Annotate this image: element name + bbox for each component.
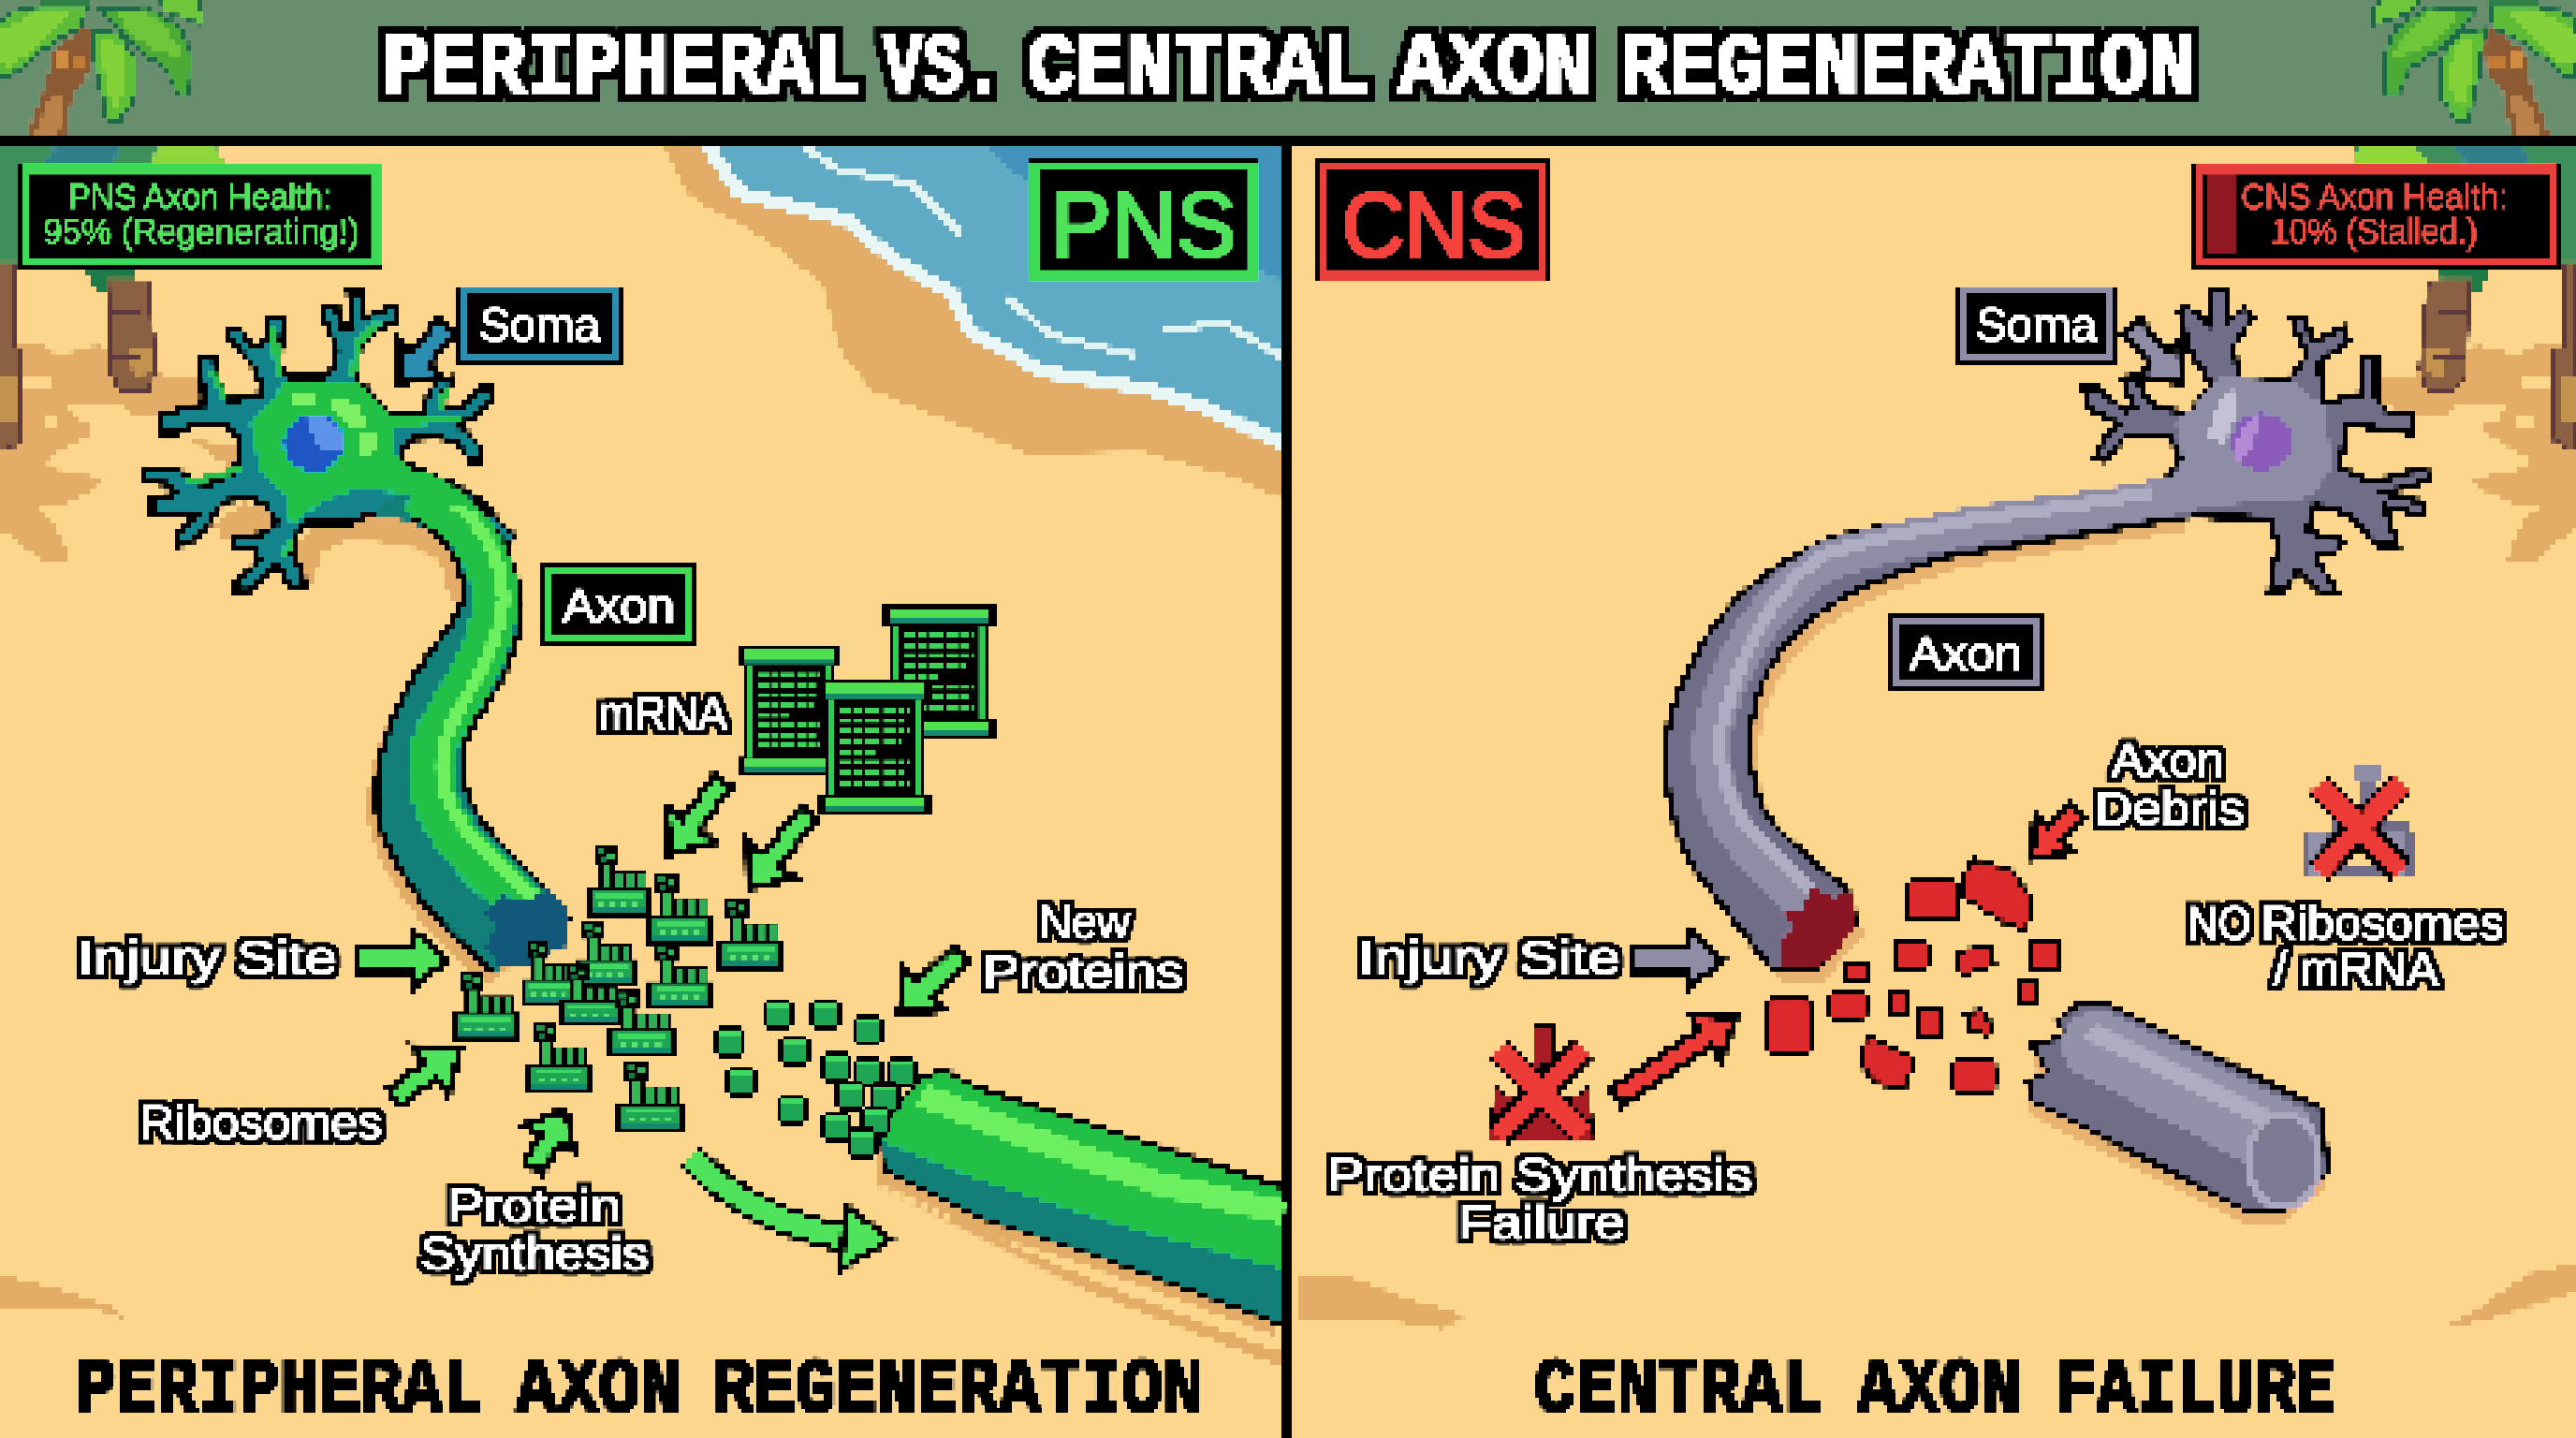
caption: peripheral axon regeneration: PERIPHERAL <box>76 1347 483 1436</box>
text: PNS health: PNS Axon Health: <box>68 178 332 217</box>
caption: peripheral axon regeneration <box>76 1347 1204 1436</box>
label: new proteins <box>983 896 1183 998</box>
arrow: new proteins <box>879 932 982 1034</box>
icon: protein synthesis failure crossed out <box>1488 1025 1595 1143</box>
new proteins <box>713 999 918 1159</box>
ocean <box>707 145 1283 445</box>
palm tree: header left <box>0 0 203 134</box>
label: PNS injury site: Injury Site <box>78 932 337 984</box>
arrow: protein synthesis <box>509 1095 591 1181</box>
axon green band <box>412 492 552 932</box>
soma body <box>2167 378 2331 506</box>
text layer: labels <box>43 173 2508 1280</box>
label: no ribosomes / mRNA: Ribosomes <box>2261 897 2504 949</box>
axon mid band <box>1712 492 2190 922</box>
arrow: soma <box>2110 307 2203 402</box>
label: no ribosomes / mRNA <box>2188 897 2504 995</box>
axon edges <box>376 491 571 974</box>
injury site wound <box>482 889 569 969</box>
PNS neuron <box>145 293 571 985</box>
label: PNS soma: Soma <box>479 299 600 351</box>
soma highlights <box>290 393 374 456</box>
soma and dendrites silhouette <box>2083 290 2430 594</box>
title: AXON <box>1398 20 1592 118</box>
mRNA scrolls <box>738 605 996 815</box>
arrow: injury site <box>1633 930 1723 990</box>
axon debris <box>1767 858 2060 1094</box>
label: CNS injury site: Injury Site <box>1358 932 1620 984</box>
box: CNS soma label <box>1955 285 2119 365</box>
fine detail layer <box>452 605 996 1159</box>
CNS badge box <box>1317 160 1551 284</box>
arrow: protein synthesis failure <box>1601 994 1751 1121</box>
right sand shadow <box>2373 344 2576 562</box>
soma body <box>250 381 484 524</box>
palm fronds and trunks: left <box>0 145 225 449</box>
box: PNS axon label <box>542 565 696 644</box>
palm tree: header right <box>2373 0 2576 134</box>
CNS arrows <box>1601 307 2203 1121</box>
foam shoreline <box>707 145 1283 445</box>
arrow: mRNA to ribosomes A <box>645 763 747 872</box>
axon body <box>1665 477 2190 971</box>
label: new proteins: Proteins <box>983 946 1183 998</box>
CNS health bar box <box>2191 161 2560 268</box>
label: axon debris: Axon <box>2112 734 2224 786</box>
soma highlight <box>2209 389 2235 445</box>
scroll 2 <box>882 605 996 740</box>
label: protein synthesis failure: Failure <box>1458 1196 1625 1249</box>
title: VS. <box>883 20 1003 118</box>
label: protein synthesis: Synthesis <box>420 1227 649 1280</box>
caption: central axon failure: CENTRAL <box>1534 1347 1823 1436</box>
left dune <box>1295 1274 1469 1329</box>
arrow: soma <box>377 308 469 401</box>
wet sand along shore <box>661 145 1283 500</box>
axon highlight <box>1720 492 2153 899</box>
palm fronds and trunks: right <box>2351 145 2576 449</box>
dune under lower axon <box>871 1184 1283 1369</box>
dendrite highlights <box>187 323 459 557</box>
left bottom dune <box>0 1274 131 1322</box>
label: no ribosomes / mRNA: NO <box>2188 897 2251 949</box>
text: CNS health: 10% (Stalled.) <box>2271 213 2478 252</box>
label: new proteins: New <box>1039 896 1131 948</box>
box: CNS axon label <box>1889 612 2042 693</box>
box: PNS soma label <box>458 285 622 365</box>
text: CNS health <box>2241 178 2508 252</box>
foam lines <box>801 145 1283 358</box>
panel: PNS beach background <box>0 145 1283 1438</box>
left sand shadow <box>0 344 203 562</box>
nucleus <box>284 414 344 472</box>
injury site wound <box>1778 887 1855 964</box>
label: CNS axon: Axon <box>1910 627 2022 680</box>
scroll 1 <box>738 646 841 776</box>
label: protein synthesis failure: Protein Synthesis <box>1327 1149 1752 1201</box>
axon highlight <box>417 482 543 903</box>
axon shadow <box>1675 492 2185 984</box>
caption: peripheral axon regeneration: AXON <box>516 1347 681 1436</box>
arrow: injury site <box>358 930 447 990</box>
arrow: axon debris <box>2012 793 2095 876</box>
PNS distal axon segment <box>874 1070 1283 1338</box>
arrow: regrowth <box>690 1156 891 1269</box>
label: mRNA: mRNA <box>598 687 728 740</box>
scroll 3 <box>817 680 932 815</box>
arrow: ribosomes <box>376 1025 477 1122</box>
label: axon debris <box>2095 734 2245 835</box>
label: ribosomes: Ribosomes <box>139 1096 382 1149</box>
header band <box>0 0 2576 135</box>
icon: no ribosomes crossed out <box>2303 767 2417 879</box>
label: protein synthesis <box>420 1180 649 1280</box>
caption: central axon failure: AXON <box>1857 1347 2022 1436</box>
title: REGENERATION <box>1620 20 2196 118</box>
label: PNS axon: Axon <box>563 580 675 632</box>
soma and dendrites silhouette <box>145 293 515 593</box>
CNS distal axon segment <box>2026 1005 2327 1225</box>
caption: central axon failure <box>1534 1347 2335 1436</box>
title <box>382 20 2196 118</box>
title: PERIPHERAL <box>382 20 861 118</box>
captions <box>76 1347 2335 1436</box>
caption: central axon failure: FAILURE <box>2056 1347 2335 1436</box>
text: PNS health: 95% (Regenerating!) <box>43 213 359 252</box>
right dune <box>2438 1263 2576 1329</box>
axon shadow <box>360 489 562 985</box>
text: PNS health <box>43 178 359 252</box>
title: CENTRAL <box>1027 20 1370 118</box>
nucleus <box>2231 413 2292 471</box>
CNS neuron <box>1665 290 2430 984</box>
label: protein synthesis: Protein <box>447 1180 621 1232</box>
text: CNS health: CNS Axon Health: <box>2241 178 2508 217</box>
label: protein synthesis failure <box>1327 1149 1752 1249</box>
PNS badge box <box>1027 160 1261 284</box>
axon edges <box>1665 479 2175 971</box>
panel: CNS beach background <box>1294 145 2576 1438</box>
ribosomes cluster <box>452 845 784 1133</box>
panel divider <box>1283 134 1294 1438</box>
PNS health bar box <box>17 161 385 268</box>
header bottom rule <box>0 134 2576 145</box>
label: CNS soma: Soma <box>1976 299 2097 351</box>
text: CNS badge: CNS <box>1341 173 1526 276</box>
text: PNS badge: PNS <box>1051 173 1237 276</box>
axon body <box>370 477 571 974</box>
label: axon debris: Debris <box>2095 783 2245 835</box>
label: no ribosomes / mRNA: / mRNA <box>2274 943 2439 995</box>
shadows under neuron <box>190 440 465 599</box>
caption: peripheral axon regeneration: REGENERATION <box>713 1347 1204 1436</box>
PNS arrows <box>358 308 982 1181</box>
arrow: mRNA to ribosomes B <box>725 794 832 907</box>
deep water <box>983 145 1283 281</box>
